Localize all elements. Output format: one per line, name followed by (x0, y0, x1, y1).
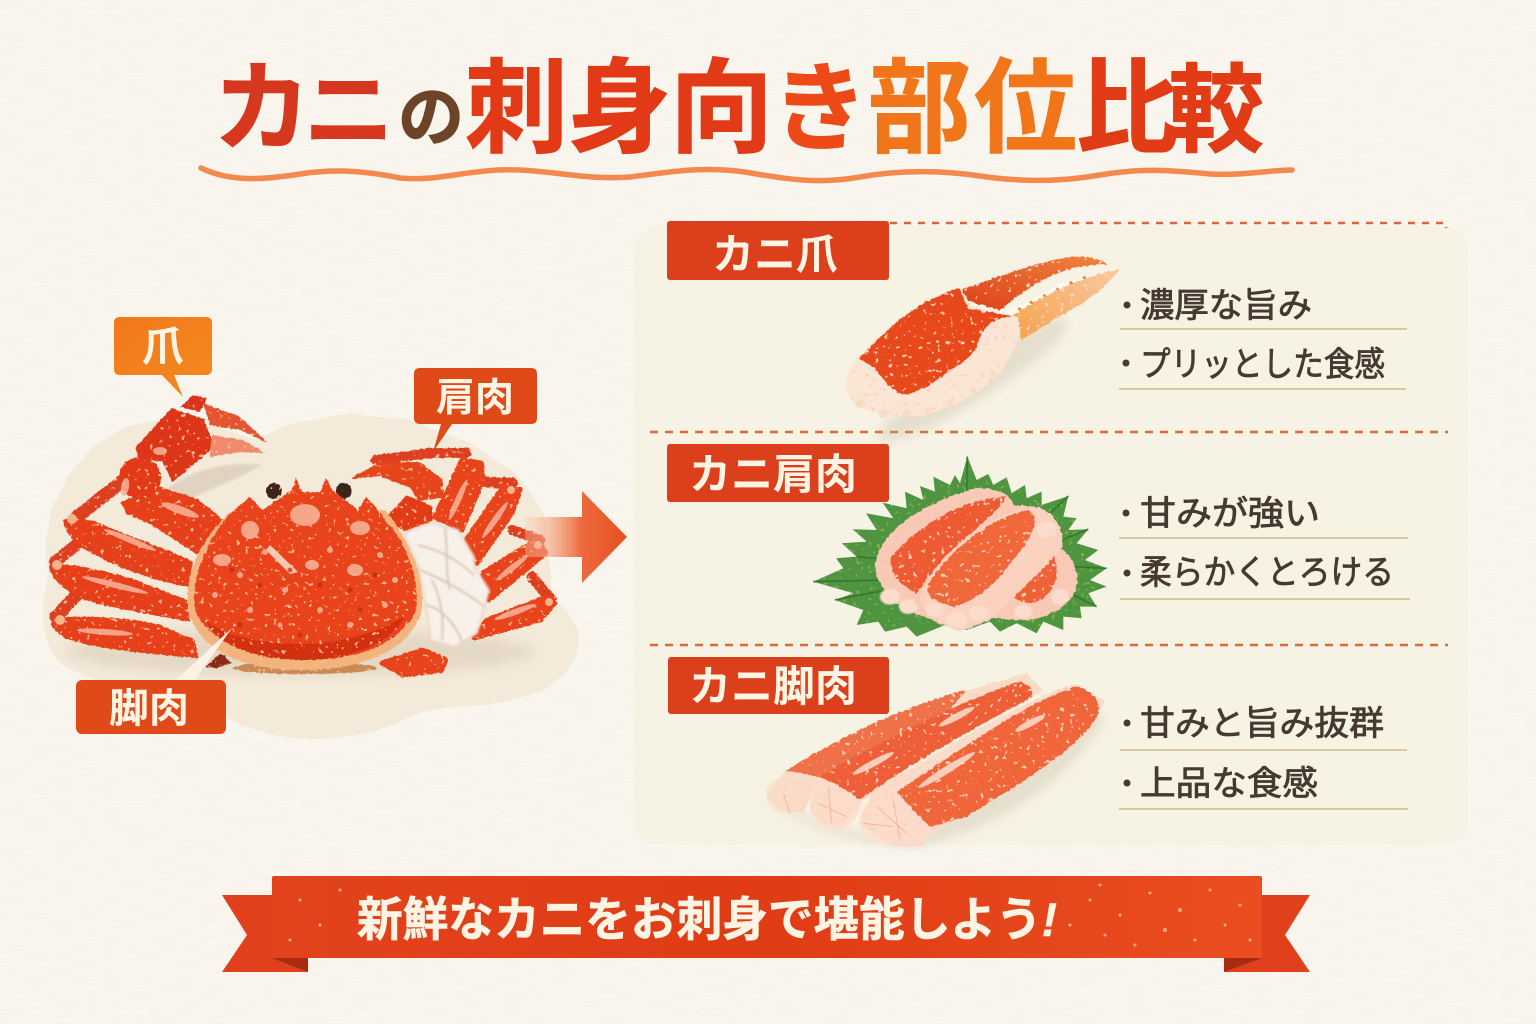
flesh lumps (880, 522, 1069, 628)
row: カニ肩肉 (667, 444, 1410, 637)
label: 脚肉 (76, 628, 232, 734)
crab right legs (382, 460, 555, 675)
crab left claw (122, 487, 225, 553)
text: leg points (1119, 705, 1408, 809)
claw pale bumps (855, 371, 997, 418)
leg glints (77, 447, 537, 637)
image: shoulder meat on leaf (813, 457, 1107, 637)
label: 爪: 爪 (142, 323, 184, 370)
title: ニ (304, 62, 394, 162)
crab illustration (49, 395, 555, 676)
watercolor blob behind crab (43, 415, 579, 739)
text: leg points: 上品な食感 (1140, 765, 1318, 803)
crab eyes (266, 483, 282, 499)
title (213, 51, 1264, 166)
leg meat glints (851, 704, 1046, 791)
tab: カニ爪: カニ爪 (712, 231, 838, 278)
comparison panel (634, 221, 1468, 847)
leg meat rounded ends (766, 776, 927, 846)
banner right tail (1224, 895, 1310, 972)
crab left legs (63, 518, 193, 587)
title: カ (213, 53, 311, 163)
title: 比 (1076, 51, 1179, 166)
text: claw points (1119, 287, 1407, 389)
text: claw points: 濃厚な旨み (1140, 287, 1312, 325)
text: shoulder points (1119, 495, 1410, 599)
carapace (194, 478, 417, 660)
tab: カニ爪 (667, 221, 889, 280)
text: shoulder points: 柔らかくとろける (1140, 554, 1394, 592)
shoulder meat on crab (404, 523, 489, 647)
leg joints (52, 486, 553, 625)
image: leg meat (763, 673, 1107, 847)
banner left tail (222, 895, 308, 972)
leg meat fibre lines (783, 788, 907, 840)
text: leg points: 甘みと旨み抜群 (1140, 705, 1384, 743)
label: 肩肉: 肩肉 (436, 377, 514, 420)
title: 位 (974, 51, 1077, 166)
label: 脚肉: 脚肉 (109, 687, 189, 731)
title wavy underline (201, 168, 1292, 181)
arrow to panel (525, 491, 627, 583)
title: き (772, 56, 868, 163)
text: claw points: プリッとした食感 (1140, 346, 1385, 384)
image: claw (845, 257, 1119, 455)
crab thin leg segments (55, 453, 551, 617)
text: shoulder points: 甘みが強い (1140, 495, 1320, 533)
carapace spots (230, 568, 378, 638)
crab shadow (65, 628, 535, 676)
title: 身 (568, 51, 671, 166)
banner text: 新鮮なカニをお刺身で堪能しよう! (357, 893, 1057, 946)
title: 刺 (465, 51, 568, 166)
row: カニ脚肉 (668, 657, 1408, 847)
row: カニ爪 (667, 221, 1407, 455)
banner speckles (288, 884, 1252, 946)
title: 部 (868, 51, 971, 166)
title: 向 (670, 51, 773, 166)
carapace highlights (212, 504, 398, 628)
crab right claw (353, 463, 442, 500)
carapace rim (187, 510, 422, 670)
banner body (272, 876, 1262, 958)
tab: カニ肩肉: カニ肩肉 (689, 451, 857, 498)
title: 較 (1168, 58, 1264, 165)
tab: カニ脚肉 (668, 657, 889, 714)
title: の (398, 80, 464, 154)
label: 肩肉 (414, 368, 537, 452)
tab: カニ脚肉: カニ脚肉 (689, 663, 857, 710)
tab: カニ肩肉 (667, 444, 889, 502)
banner (222, 876, 1310, 972)
label: 爪 (114, 317, 212, 397)
